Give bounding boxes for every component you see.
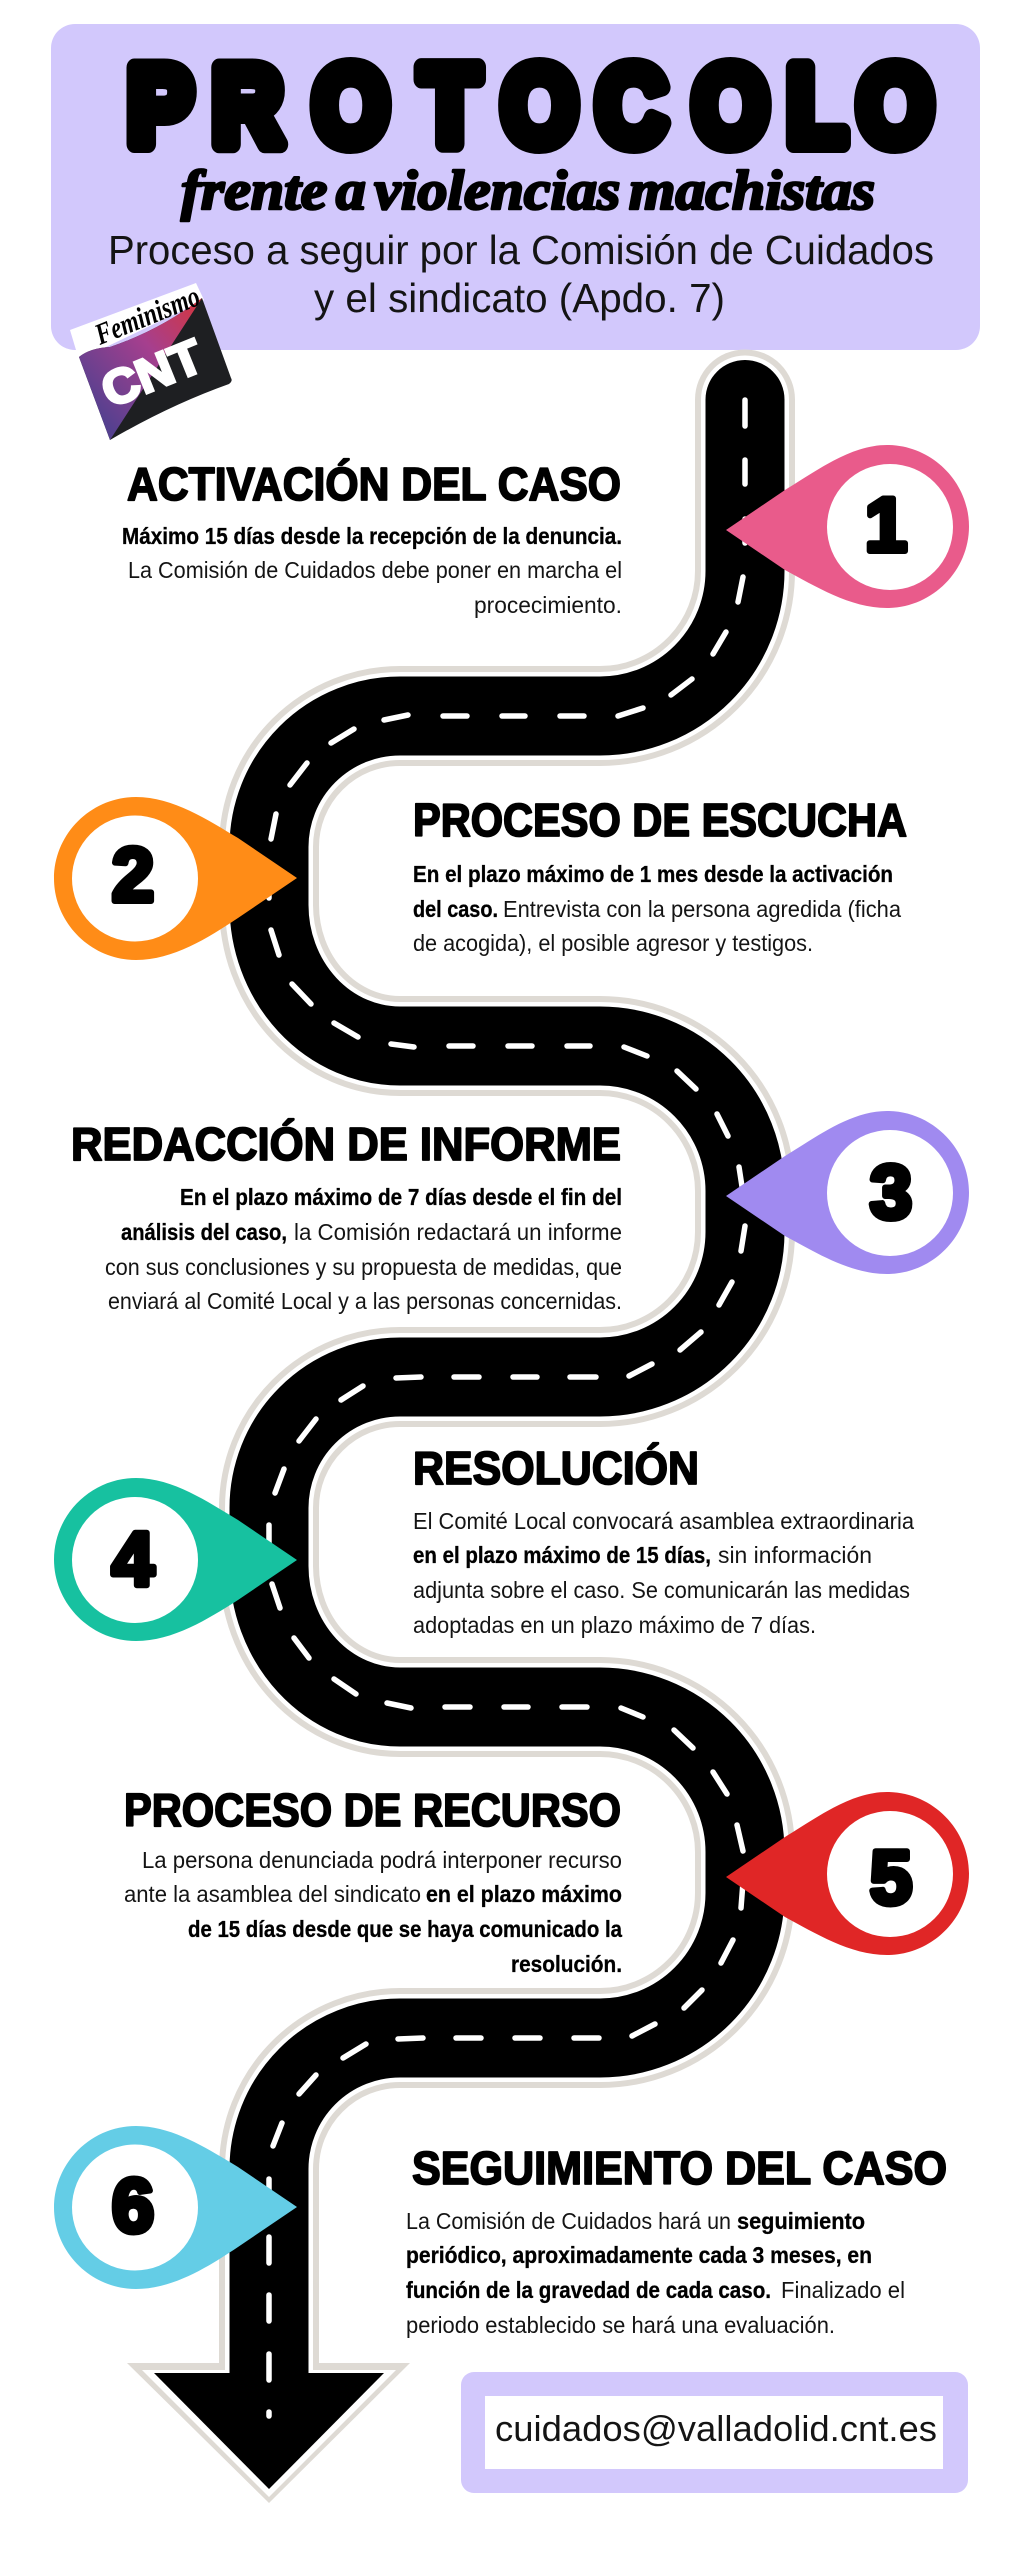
contact email box: cuidados@valladolid.cnt.es [495, 2408, 937, 2449]
description [108, 227, 934, 321]
body text: del caso. [413, 896, 498, 922]
body text: Finalizado el [781, 2277, 905, 2303]
pin 6 [54, 2126, 297, 2289]
pin 5 [726, 1792, 969, 1955]
logo: Feminismo CNT: Feminismo [90, 280, 205, 352]
description: Proceso a seguir por la Comisión de Cuidados [108, 227, 934, 273]
title: PROTOCOLO [128, 45, 933, 169]
body text: La Comisión de Cuidados debe poner en marcha el [128, 557, 622, 583]
body text: Máximo 15 días desde la recepción de la denuncia. [122, 523, 622, 549]
body text: procecimiento. [474, 592, 622, 618]
body text [406, 2208, 905, 2338]
body text: en el plazo máximo de 15 días, [413, 1542, 711, 1568]
body text: seguimiento [737, 2208, 865, 2234]
body text: La Comisión de Cuidados hará un [406, 2208, 731, 2234]
heading: PROCESO DE RECURSO [124, 1784, 621, 1836]
body text: En el plazo máximo de 7 días desde el fin del [180, 1184, 622, 1210]
step 6: seguimiento del caso [406, 2142, 947, 2338]
road with arrow [127, 350, 795, 2503]
body text: periódico, aproximadamente cada 3 meses, en [406, 2242, 872, 2268]
body text [413, 861, 901, 956]
pin 6: 6 [112, 2164, 154, 2249]
body text: La persona denunciada podrá interponer recurso [142, 1847, 622, 1873]
heading: RESOLUCIÓN [413, 1442, 699, 1494]
header panel [51, 24, 980, 350]
pin 2 [54, 797, 297, 960]
pin 2: 2 [112, 833, 154, 918]
body text: Entrevista con la persona agredida (ficha [503, 896, 901, 922]
pin 4: 4 [112, 1517, 154, 1602]
heading: ACTIVACIÓN DEL CASO [127, 458, 621, 510]
step 2: proceso de escucha [413, 794, 907, 956]
pin 3 [726, 1111, 969, 1274]
pin 3: 3 [870, 1150, 912, 1235]
pin 4 [54, 1478, 297, 1641]
body text: de acogida), el posible agresor y testigos. [413, 930, 813, 956]
body text [413, 1508, 914, 1638]
step 5: proceso de recurso [124, 1784, 622, 1977]
body text: adoptadas en un plazo máximo de 7 días. [413, 1612, 816, 1638]
logo: Feminismo CNT: CNT [94, 330, 211, 418]
body text: función de la gravedad de cada caso. [406, 2277, 771, 2303]
body text: análisis del caso, [121, 1219, 287, 1245]
body text: de 15 días desde que se haya comunicado la [188, 1916, 622, 1942]
body text [105, 1184, 622, 1314]
description: y el sindicato (Apdo. 7) [314, 275, 725, 321]
pin 1: 1 [865, 483, 907, 568]
body text: resolución. [511, 1951, 622, 1977]
body text: ante la asamblea del sindicato [124, 1881, 421, 1907]
body text: enviará al Comité Local y a las personas concernidas. [108, 1288, 622, 1314]
body text: sin información [718, 1542, 872, 1568]
body text [122, 523, 622, 618]
body text: la Comisión redactará un informe [294, 1219, 622, 1245]
heading: SEGUIMIENTO DEL CASO [412, 2142, 947, 2194]
heading: REDACCIÓN DE INFORME [71, 1118, 621, 1170]
contact email box [461, 2372, 968, 2493]
body text: El Comité Local convocará asamblea extraordinaria [413, 1508, 914, 1534]
body text: adjunta sobre el caso. Se comunicarán las medidas [413, 1577, 910, 1603]
step 3: redacción de informe [71, 1118, 622, 1314]
logo: Feminismo CNT [70, 280, 232, 440]
body text [124, 1847, 622, 1977]
pin 5: 5 [870, 1836, 912, 1921]
body text: con sus conclusiones y su propuesta de medidas, que [105, 1254, 622, 1280]
subtitle: frente a violencias machistas [181, 160, 875, 222]
step 1: activación del caso [122, 458, 622, 618]
body text: En el plazo máximo de 1 mes desde la activación [413, 861, 893, 887]
pin 1 [726, 445, 969, 608]
heading: PROCESO DE ESCUCHA [413, 794, 907, 846]
body text: periodo establecido se hará una evaluación. [406, 2312, 835, 2338]
body text: en el plazo máximo [426, 1881, 622, 1907]
step 4: resolución [413, 1442, 914, 1638]
